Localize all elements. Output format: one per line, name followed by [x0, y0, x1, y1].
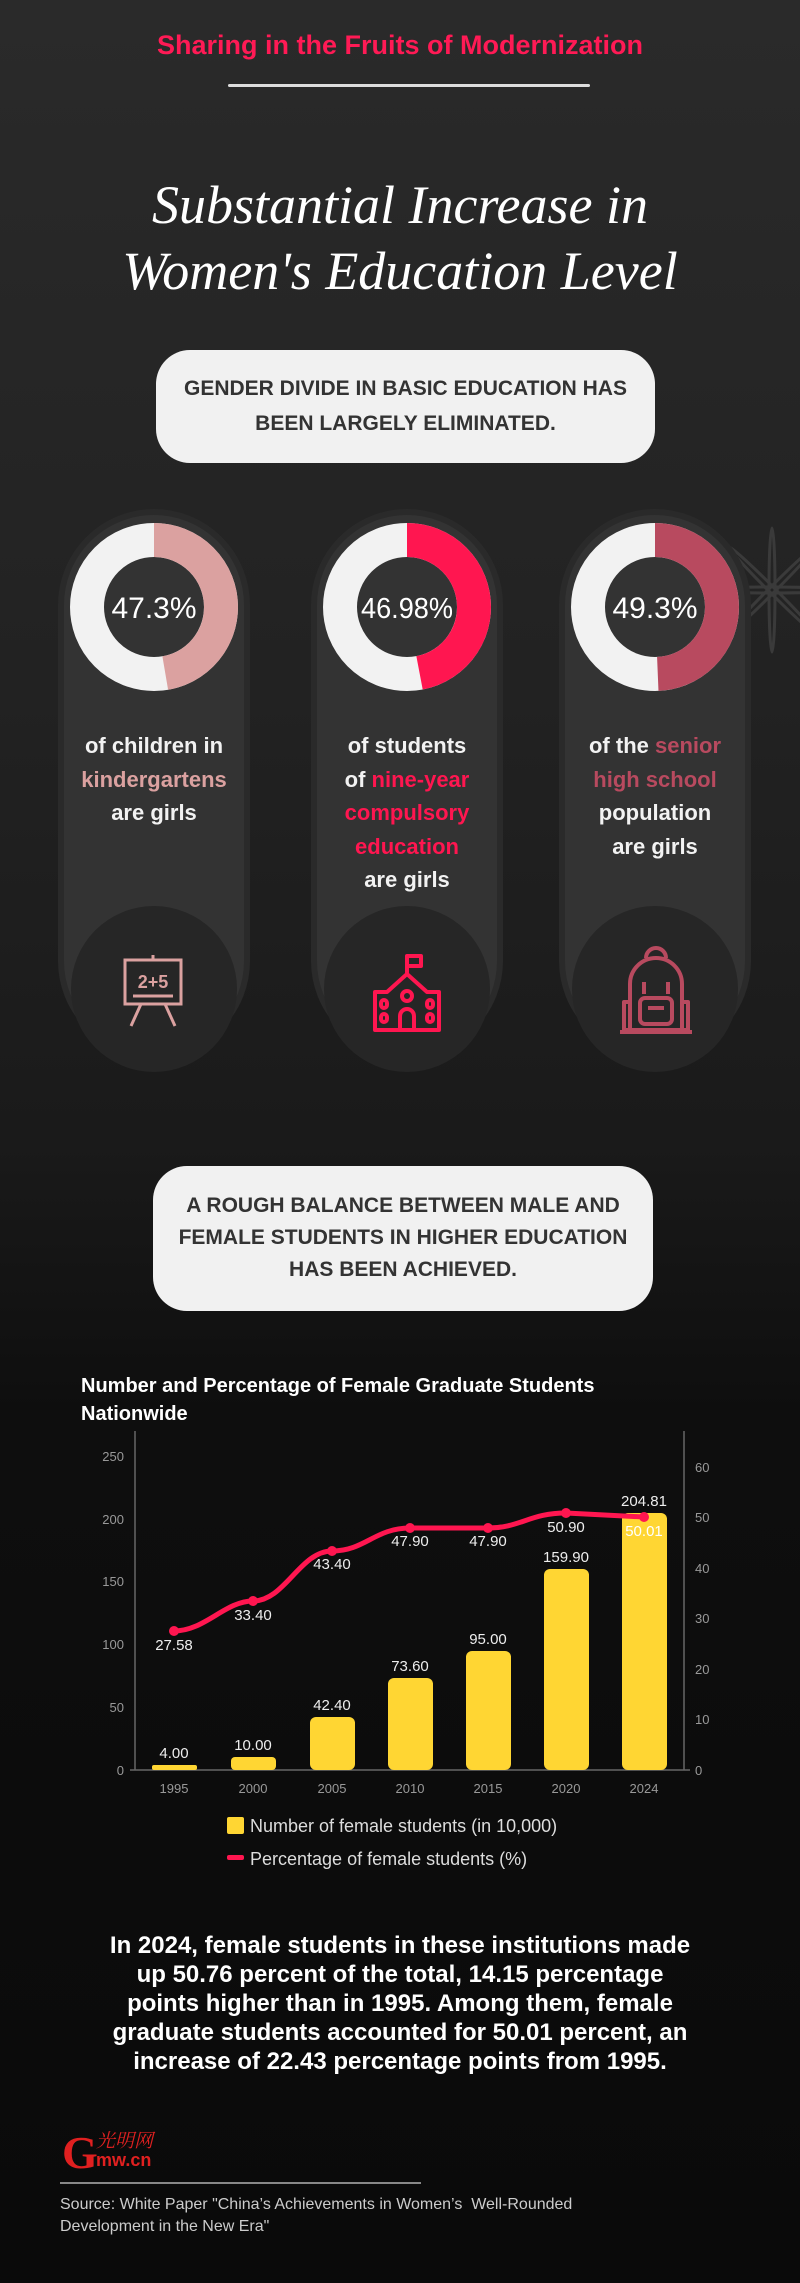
text: of children in	[85, 733, 223, 758]
text	[345, 733, 470, 892]
text	[589, 733, 721, 858]
donut 46.98%	[323, 523, 491, 691]
header: Sharing in the Fruits of Modernization	[157, 30, 643, 60]
callout box 2	[153, 1166, 653, 1311]
bar labels: 4.00	[159, 1745, 189, 1762]
panel: kindergarten	[58, 509, 250, 1057]
text: kindergartens	[81, 766, 227, 792]
donut 49.3%: 49.3%	[612, 592, 698, 625]
right axis: 50	[695, 1510, 709, 1525]
legend	[227, 1816, 557, 1869]
summary paragraph	[110, 1932, 690, 2075]
title	[122, 175, 678, 301]
title: Women's Education Level	[122, 241, 678, 301]
decorative star	[731, 526, 800, 654]
callout box 1	[156, 350, 655, 463]
x labels: 2024	[630, 1781, 658, 1796]
donut 49.3%	[571, 523, 739, 691]
x labels: 2020	[552, 1781, 580, 1796]
left axis: 100	[102, 1637, 124, 1652]
text: of nine-year	[345, 766, 469, 792]
summary paragraph: points higher than in 1995. Among them, female	[127, 1990, 673, 2017]
logo: 光明网	[96, 2126, 153, 2153]
text: high school	[593, 766, 717, 792]
right axis: 20	[695, 1662, 709, 1677]
text: of the senior	[589, 733, 721, 758]
line labels: 33.40	[234, 1607, 272, 1624]
panel: compulsory	[311, 509, 503, 1057]
text: education	[355, 834, 459, 858]
text: population	[599, 800, 711, 825]
callout box 2: A ROUGH BALANCE BETWEEN MALE AND	[186, 1194, 620, 1217]
panel: senior high	[559, 509, 751, 1057]
legend: Number of female students (in 10,000)	[250, 1816, 557, 1836]
icon: blackboard: 2+5	[138, 972, 168, 992]
logo	[62, 2126, 156, 2178]
summary paragraph: graduate students accounted for 50.01 percent, an	[113, 2019, 687, 2046]
line labels: 47.90	[391, 1533, 429, 1550]
x labels: 2010	[396, 1781, 424, 1796]
right axis: 60	[695, 1460, 709, 1475]
percentage line	[174, 1513, 644, 1631]
icon: school	[324, 906, 490, 1072]
line labels: 50.90	[547, 1519, 585, 1536]
x labels: 2015	[474, 1781, 502, 1796]
line labels: 27.58	[155, 1637, 193, 1654]
source divider	[60, 2182, 421, 2184]
line labels: 50.01	[625, 1523, 663, 1540]
right axis: 40	[695, 1561, 709, 1576]
bar labels: 73.60	[391, 1658, 429, 1675]
summary paragraph: up 50.76 percent of the total, 14.15 percentage	[137, 1961, 663, 1988]
logo: mw.cn	[96, 2150, 151, 2170]
source: Development in the New Era"	[60, 2218, 269, 2235]
text: compulsory	[345, 800, 469, 825]
callout box 2: HAS BEEN ACHIEVED.	[289, 1258, 517, 1281]
summary paragraph: In 2024, female students in these institutions made	[110, 1932, 690, 1959]
bar labels: 95.00	[469, 1631, 507, 1648]
text: are girls	[364, 867, 450, 892]
donut 46.98%: 46.98%	[361, 593, 453, 625]
x labels: 2000	[239, 1781, 267, 1796]
donut 47.3%: 47.3%	[111, 592, 197, 625]
left axis: 200	[102, 1512, 124, 1527]
bar labels	[159, 1493, 667, 1762]
source: Source: White Paper "China’s Achievements in Women’s Well-Rounded	[60, 2196, 572, 2213]
left axis: 0	[117, 1763, 124, 1778]
callout box 1: BEEN LARGELY ELIMINATED.	[255, 412, 556, 435]
text: are girls	[612, 834, 698, 858]
icon: blackboard	[71, 906, 237, 1072]
line labels	[155, 1519, 663, 1654]
header underline	[228, 84, 590, 87]
left axis: 250	[102, 1449, 124, 1464]
legend: Percentage of female students (%)	[250, 1849, 527, 1869]
icon: backpack	[572, 906, 738, 1072]
left axis: 50	[110, 1700, 124, 1715]
chart: bars and line	[102, 1431, 709, 1796]
bar labels: 42.40	[313, 1697, 351, 1714]
donut 47.3%	[70, 523, 238, 691]
right axis: 0	[695, 1763, 702, 1778]
chart title: Nationwide	[81, 1403, 188, 1425]
right axis: 10	[695, 1712, 709, 1727]
text	[81, 733, 227, 825]
source	[60, 2196, 572, 2235]
bar labels: 159.90	[543, 1549, 589, 1566]
left axis	[102, 1449, 124, 1778]
callout box 2: FEMALE STUDENTS IN HIGHER EDUCATION	[179, 1226, 627, 1249]
bar labels: 10.00	[234, 1737, 272, 1754]
text: of students	[348, 733, 466, 758]
text: are girls	[111, 800, 197, 825]
left axis: 150	[102, 1574, 124, 1589]
right axis: 30	[695, 1611, 709, 1626]
bars	[152, 1513, 667, 1770]
bar labels: 204.81	[621, 1493, 667, 1510]
chart title: Number and Percentage of Female Graduate Students	[81, 1375, 594, 1397]
title: Substantial Increase in	[152, 175, 648, 235]
right axis	[695, 1460, 709, 1778]
x labels: 1995	[160, 1781, 188, 1796]
line labels: 47.90	[469, 1533, 507, 1550]
line labels: 43.40	[313, 1556, 351, 1573]
x labels	[160, 1781, 658, 1796]
summary paragraph: increase of 22.43 percentage points from 1995.	[133, 2048, 667, 2075]
logo: G	[62, 2127, 98, 2178]
chart title	[81, 1375, 594, 1425]
callout box 1: GENDER DIVIDE IN BASIC EDUCATION HAS	[184, 377, 627, 400]
x labels: 2005	[318, 1781, 346, 1796]
